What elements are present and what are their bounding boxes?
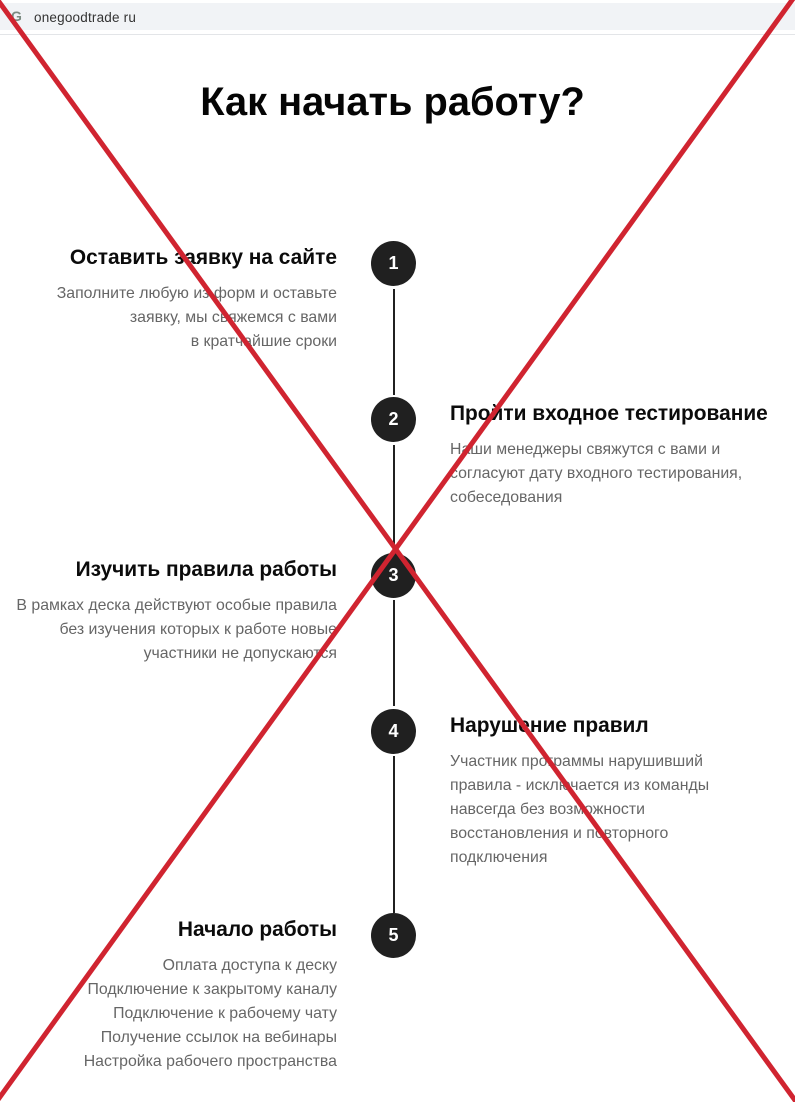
step 1 text: Заполните любую из форм и оставьте [57, 285, 337, 302]
step 5 text: Получение ссылок на вебинары [101, 1029, 337, 1046]
step 4 text: подключения [450, 849, 547, 866]
icon: google logo: G [11, 8, 22, 24]
step 2 text: собеседования [450, 489, 562, 506]
step 3 text: без изучения которых к работе новые [60, 621, 337, 638]
step 1 heading: Оставить заявку на сайте [70, 246, 337, 269]
step 2 heading: Пройти входное тестирование [450, 402, 768, 425]
step 4 number [371, 709, 416, 754]
step 4 text: навсегда без возможности [450, 801, 645, 818]
step 3 text: В рамках деска действуют особые правила [16, 597, 337, 614]
step 5 text: Подключение к рабочему чату [113, 1005, 337, 1022]
title: Как начать работу? [200, 80, 585, 124]
step 4 text: восстановления и повторного [450, 825, 668, 842]
step 2 text: Наши менеджеры свяжутся с вами и [450, 441, 720, 458]
step 4 heading: Нарушение правил [450, 714, 649, 737]
step 3 number: 3 [388, 565, 398, 585]
step 4 number: 4 [388, 721, 398, 741]
step 5 text: Настройка рабочего пространства [84, 1053, 337, 1070]
step 4 text: Участник программы нарушивший [450, 753, 703, 770]
step 1 text: в кратчайшие сроки [191, 333, 337, 350]
step 1 text: заявку, мы свяжемся с вами [130, 309, 337, 326]
step 3 text: участники не допускаются [144, 645, 337, 662]
timeline line [393, 289, 395, 913]
step 5 number: 5 [388, 925, 398, 945]
step 1 number [371, 241, 416, 286]
step 5 text: Оплата доступа к деску [163, 957, 337, 974]
step 4 text: правила - исключается из команды [450, 777, 709, 794]
step 5 number [371, 913, 416, 958]
step 1 text [57, 285, 337, 350]
step 1 number: 1 [388, 253, 398, 273]
step 5 text: Подключение к закрытому каналу [87, 981, 337, 998]
address text: onegoodtrade ru [34, 10, 136, 25]
browser address bar [0, 0, 795, 35]
step 5 text [84, 957, 337, 1070]
step 2 text: согласуют дату входного тестирования, [450, 465, 742, 482]
step 4 text [450, 753, 709, 866]
step 5 heading: Начало работы [178, 918, 337, 941]
step 2 number: 2 [388, 409, 398, 429]
step 3 number [371, 553, 416, 598]
step 3 heading: Изучить правила работы [76, 558, 337, 581]
step 3 text [16, 597, 337, 662]
step 2 number [371, 397, 416, 442]
step 2 text [450, 441, 742, 506]
